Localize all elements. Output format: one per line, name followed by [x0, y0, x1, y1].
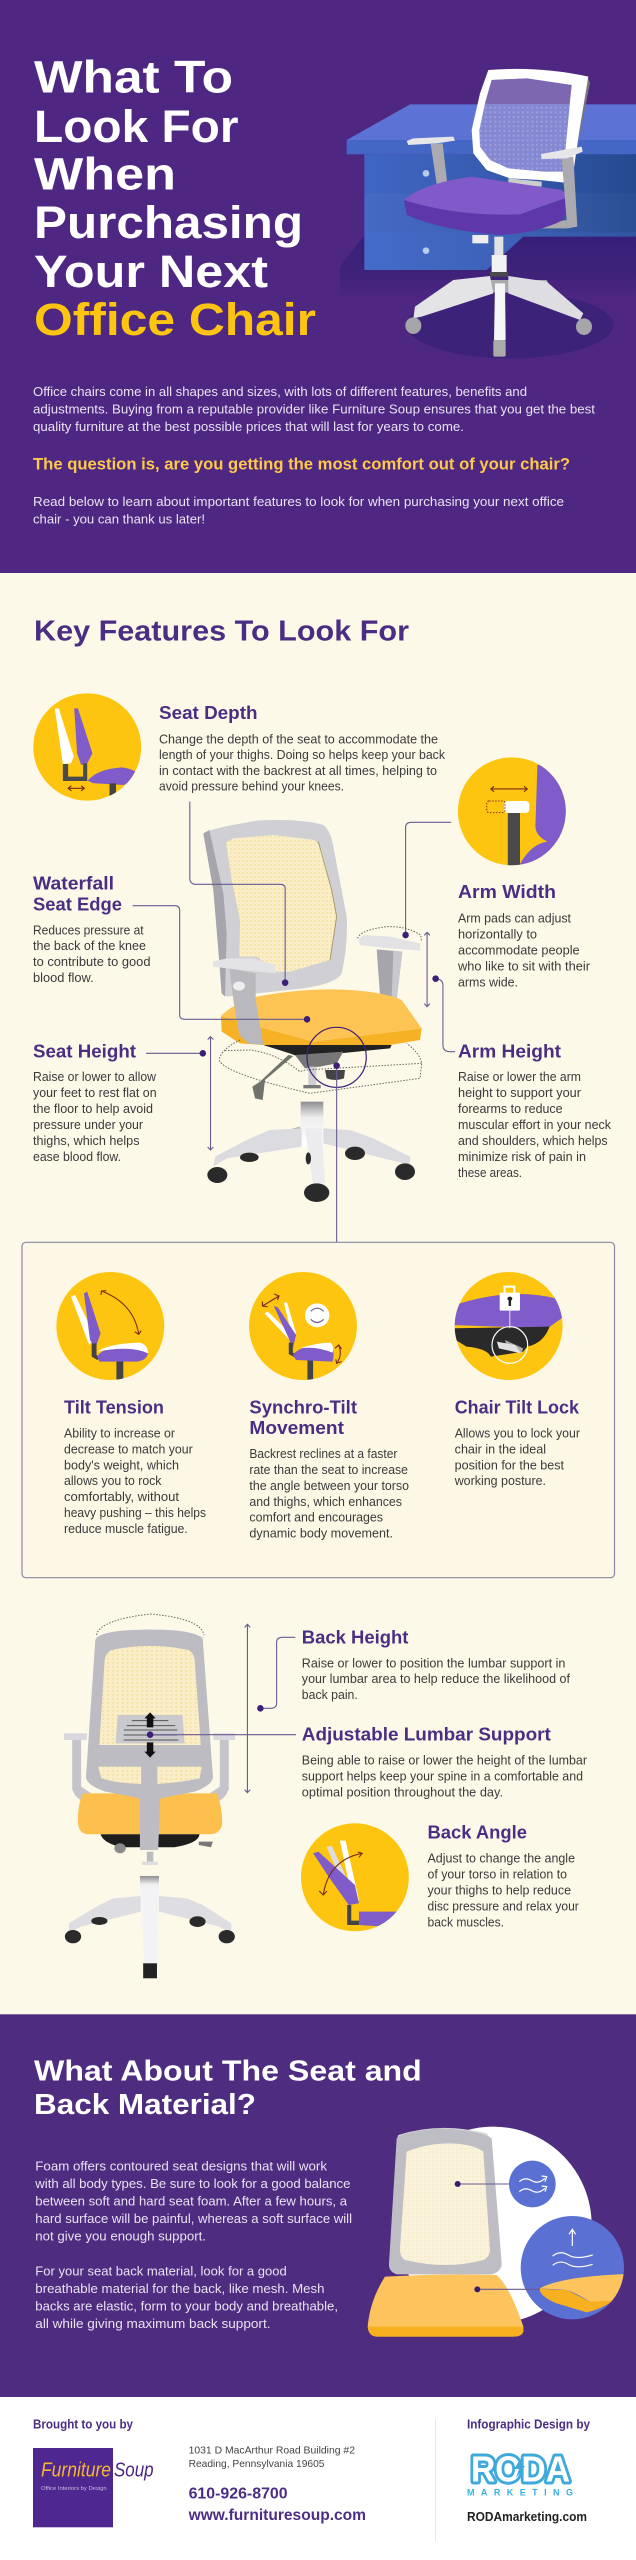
footer phone: 610-926-8700: [189, 2485, 288, 2502]
panel: tilt features: [22, 1242, 614, 1578]
feature: adjustable lumbar support text: optimal position throughout the day.: [302, 1786, 503, 1800]
feature: waterfall seat edge text: Reduces pressure at: [33, 923, 144, 937]
feature: seat depth text: avoid pressure behind your knees.: [159, 780, 344, 794]
material text: foam: with all body types. Be sure to look for a good balance: [34, 2176, 350, 2191]
feature: arm width text: who like to sit with their: [457, 960, 590, 974]
callout: arm height line: [436, 979, 455, 1052]
footer label: design credit: Infographic Design by: [467, 2417, 590, 2431]
feature: tilt tension text: reduce muscle fatigue.: [64, 1522, 188, 1536]
feature: seat height text: Seat Height: [33, 1041, 136, 1061]
feature: chair tilt lock text: [454, 1397, 580, 1488]
callouts: side view chair: [133, 802, 455, 1242]
callout dots: [200, 932, 439, 1069]
logo: Furniture Soup: Furniture: [41, 2460, 111, 2482]
icon: back angle: [301, 1823, 409, 1931]
feature: synchro-tilt text: [249, 1397, 409, 1541]
intro text: adjustments. Buying from a reputable provider like Furniture Soup ensures that you get the best: [33, 402, 595, 417]
feature: chair tilt lock text: working posture.: [454, 1474, 546, 1488]
feature: synchro-tilt text: Movement: [249, 1418, 344, 1438]
feature: tilt tension text: comfortably, without: [64, 1490, 180, 1504]
intro closing text: [33, 494, 564, 526]
icon: synchro-tilt: [249, 1272, 357, 1381]
icon: arm width: [458, 757, 568, 866]
feature: arm height text: height to support your: [458, 1086, 581, 1100]
feature: waterfall seat edge text: [33, 873, 151, 985]
feature: back height text: your lumbar area to help reduce the likelihood of: [302, 1672, 571, 1686]
feature: seat height text: pressure under your: [33, 1118, 143, 1132]
feature: tilt tension text: Ability to increase or: [64, 1426, 175, 1440]
feature: synchro-tilt text: and thighs, which enhances: [249, 1495, 402, 1509]
logo: RODA Marketing: MARKETING: [467, 2488, 573, 2498]
feature: seat height text: [33, 1041, 157, 1164]
callout: back height range arrow: [245, 1624, 250, 1793]
logo: Furniture Soup: Office Interiors by Design: [41, 2486, 107, 2492]
feature: tilt tension text: body's weight, which: [64, 1458, 179, 1472]
illustration: seat and back material: [368, 2127, 627, 2337]
feature: seat height text: thighs, which helps: [33, 1134, 140, 1148]
feature: chair tilt lock text: chair in the ideal: [455, 1442, 546, 1456]
callout: tilt mechanism line: [336, 1066, 338, 1242]
feature: seat height text: Raise or lower to allow: [33, 1070, 157, 1084]
feature: arm height text: [458, 1041, 612, 1180]
feature: synchro-tilt text: rate than the seat to increase: [249, 1463, 408, 1477]
title: [34, 52, 316, 345]
feature: arm width text: Arm pads can adjust: [458, 912, 572, 926]
title: Office Chair: [34, 294, 316, 345]
callout: tilt mechanism ring: [307, 1027, 366, 1087]
callout dots: material: [455, 2181, 480, 2292]
icon: chair tilt lock: [450, 1272, 564, 1380]
feature: back height text: Back Height: [302, 1627, 408, 1647]
feature: adjustable lumbar support text: support helps keep your spine in a comfortable and: [302, 1770, 583, 1784]
feature: seat height text: the floor to help avoid: [33, 1102, 153, 1116]
footer design website: RODAmarketing.com: [467, 2510, 587, 2524]
logo: RODA Marketing: RODA: [471, 2448, 570, 2490]
callout: foam line: [477, 2288, 540, 2290]
heading: material: What About The Seat and: [34, 2056, 422, 2088]
illustration: office chair at desk: [340, 69, 636, 358]
callout dots: back view: [147, 1705, 264, 1738]
callout: back height line: [260, 1637, 295, 1708]
feature: chair tilt lock text: position for the best: [455, 1458, 565, 1472]
feature: back angle text: Adjust to change the angle: [428, 1852, 575, 1866]
material text: foam: not give you enough support.: [35, 2229, 206, 2244]
feature: tilt tension text: heavy pushing – this helps: [64, 1506, 206, 1520]
heading: key features: Key Features To Look For: [34, 616, 409, 648]
material text: foam: between soft and hard seat foam. After a few hours, a: [35, 2194, 348, 2209]
material text: foam: Foam offers contoured seat designs that will work: [35, 2159, 327, 2174]
icon: seat depth: [33, 693, 141, 801]
feature: seat depth text: length of your thighs. Doing so helps keep your back: [159, 748, 446, 762]
material text: mesh: backs are elastic, form to your body and breathable,: [35, 2299, 338, 2314]
intro text: Office chairs come in all shapes and sizes, with lots of different features, benefits and: [33, 384, 527, 399]
feature: arm height text: these areas.: [458, 1166, 522, 1180]
feature: waterfall seat edge text: blood flow.: [33, 971, 94, 985]
feature: arm width text: accommodate people: [458, 944, 580, 958]
material text: mesh: all while giving maximum back support.: [35, 2316, 270, 2331]
material text: foam: [34, 2159, 352, 2244]
feature: arm height text: muscular effort in your neck: [458, 1118, 612, 1132]
logo: Furniture Soup: Soup: [114, 2460, 154, 2482]
callout: mesh line: [458, 2183, 509, 2185]
illustration: side view chair with callouts: [133, 802, 455, 1242]
feature: back height text: back pain.: [302, 1688, 358, 1702]
callout: arm height range arrow: [424, 932, 430, 1007]
footer website: www.furnituresoup.com: [188, 2507, 366, 2524]
intro closing text: Read below to learn about important features to look for when purchasing your next office: [33, 494, 564, 509]
feature: back angle text: of your torso in relation to: [428, 1868, 567, 1882]
panel: hero: [0, 0, 636, 573]
feature: seat depth text: Change the depth of the seat to accommodate the: [159, 732, 438, 746]
feature: synchro-tilt text: Synchro-Tilt: [249, 1397, 357, 1417]
feature: arm width text: Arm Width: [458, 882, 556, 902]
feature: arm height text: minimize risk of pain in: [458, 1150, 586, 1164]
question callout: The question is, are you getting the most comfort out of your chair?: [33, 456, 570, 474]
title: What To: [34, 52, 233, 103]
feature: arm width text: arms wide.: [458, 975, 518, 989]
feature: waterfall seat edge text: Waterfall: [33, 873, 114, 893]
feature: tilt tension text: [64, 1397, 206, 1536]
callout: seat depth line: [190, 802, 285, 983]
feature: seat depth text: [159, 703, 446, 794]
feature: adjustable lumbar support text: [302, 1725, 587, 1800]
icon: tilt tension: [56, 1272, 164, 1381]
feature: arm height text: forearms to reduce: [458, 1102, 563, 1116]
feature: back angle text: Back Angle: [428, 1823, 527, 1843]
title: When: [34, 149, 176, 200]
feature: seat depth text: Seat Depth: [159, 703, 258, 723]
feature: seat depth text: in contact with the backrest at all times, helping to: [159, 764, 437, 778]
material text: mesh: [35, 2264, 338, 2331]
feature: waterfall seat edge text: Seat Edge: [33, 895, 122, 915]
heading: material: Back Material?: [34, 2089, 256, 2121]
feature: adjustable lumbar support text: Adjustable Lumbar Support: [302, 1725, 551, 1745]
feature: back angle text: [428, 1823, 579, 1929]
material text: foam: hard surface will be painful, whereas a soft surface will: [35, 2211, 352, 2226]
logo: Furniture Soup: [33, 2448, 154, 2527]
callout: waterfall line: [133, 906, 307, 1019]
feature: adjustable lumbar support text: Being able to raise or lower the height of the lumbar: [302, 1754, 587, 1768]
callout: seat height range arrow: [208, 1037, 213, 1150]
footer address: 1031 D MacArthur Road Building #2: [189, 2444, 355, 2456]
feature: tilt tension text: Tilt Tension: [64, 1397, 164, 1417]
feature: arm width text: [457, 882, 590, 989]
heading: material: [34, 2056, 422, 2121]
title: Your Next: [34, 246, 268, 297]
feature: arm height text: Raise or lower the arm: [458, 1070, 581, 1084]
intro text: [33, 384, 595, 434]
feature: chair tilt lock text: Chair Tilt Lock: [455, 1397, 580, 1417]
feature: waterfall seat edge text: to contribute to good: [33, 955, 151, 969]
feature: back height text: Raise or lower to position the lumbar support in: [302, 1656, 565, 1670]
feature: back angle text: your thighs to help reduce: [428, 1883, 571, 1897]
footer address: Reading, Pennsylvania 19605: [189, 2458, 325, 2470]
panel: material: [0, 2014, 636, 2397]
callout: lumbar line: [150, 1734, 296, 1736]
illustration: back view chair: [64, 1614, 296, 1978]
feature: synchro-tilt text: Backrest reclines at a faster: [249, 1447, 397, 1461]
feature: synchro-tilt text: dynamic body movement.: [249, 1527, 393, 1541]
feature: seat height text: your feet to rest flat on: [33, 1086, 157, 1100]
feature: back angle text: disc pressure and relax your: [428, 1899, 579, 1913]
feature: tilt tension text: allows you to rock: [64, 1474, 162, 1488]
title: Look For: [34, 101, 239, 152]
footer label: brought to you by: Brought to you by: [33, 2417, 133, 2431]
feature: synchro-tilt text: comfort and encourages: [249, 1511, 383, 1525]
title: Purchasing: [34, 197, 303, 248]
feature: back angle text: back muscles.: [428, 1915, 504, 1929]
feature: chair tilt lock text: Allows you to lock your: [455, 1426, 580, 1440]
feature: tilt tension text: decrease to match your: [64, 1442, 193, 1456]
material text: mesh: breathable material for the back, like mesh. Mesh: [35, 2281, 325, 2296]
feature: arm width text: horizontally to: [458, 928, 537, 942]
footer address: [189, 2444, 355, 2470]
material text: mesh: For your seat back material, look for a good: [35, 2264, 287, 2279]
chair body: side view: [203, 820, 422, 1202]
feature: back height text: [302, 1627, 571, 1702]
feature: synchro-tilt text: the angle between your torso: [249, 1479, 409, 1493]
callout: seat height line: [146, 1052, 203, 1054]
feature: arm height text: and shoulders, which helps: [458, 1134, 608, 1148]
intro closing text: chair - you can thank us later!: [33, 512, 205, 526]
panel: footer: [0, 2397, 636, 2560]
feature: seat height text: ease blood flow.: [33, 1150, 121, 1164]
feature: arm height text: Arm Height: [458, 1041, 561, 1061]
intro text: quality furniture at the best possible prices that will last for years to come.: [33, 419, 464, 434]
feature: waterfall seat edge text: the back of the knee: [33, 939, 146, 953]
callout: arm width line: [406, 822, 451, 935]
